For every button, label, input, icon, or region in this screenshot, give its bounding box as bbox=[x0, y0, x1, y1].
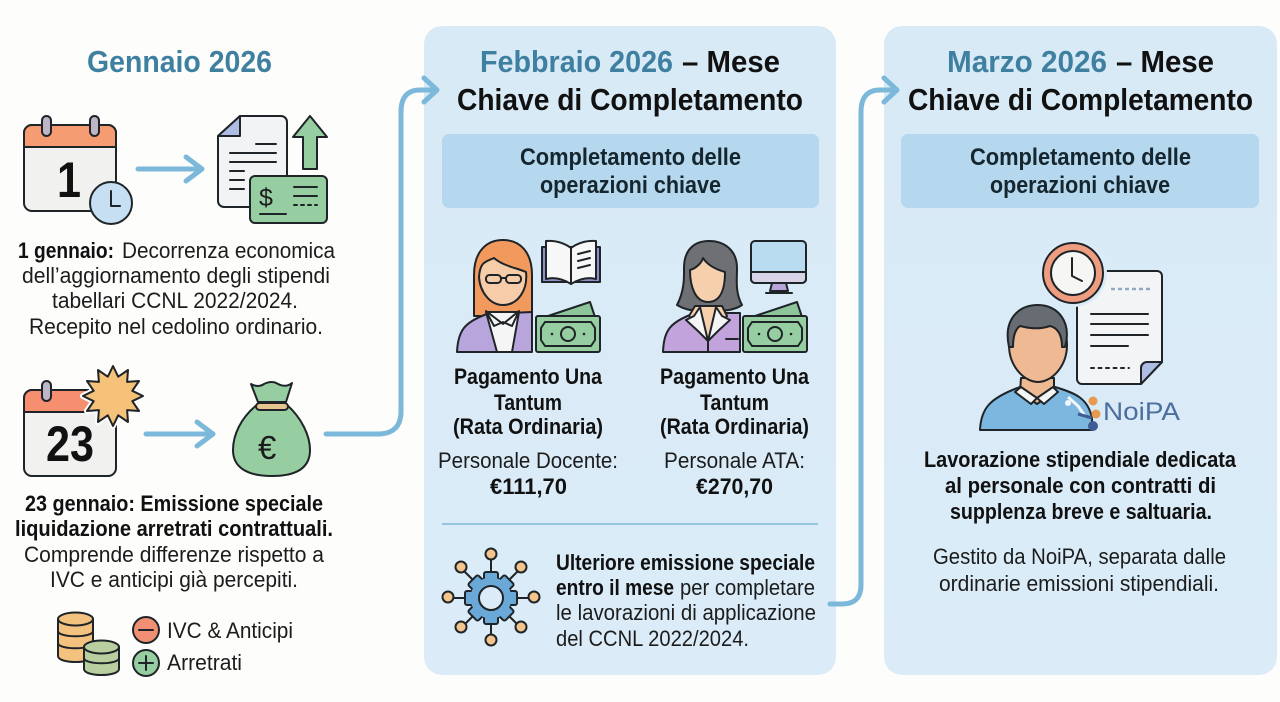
text: 23 gennaio: liquidazione arretrati contrattuali. bbox=[15, 516, 333, 541]
heading: febbraio: – Mese bbox=[682, 44, 780, 79]
banner: completamento: Completamento delle bbox=[970, 144, 1191, 171]
text: 1 gennaio: Recepito nel cedolino ordinario. bbox=[29, 314, 323, 339]
text: 23 gennaio: IVC e anticipi già percepiti. bbox=[50, 567, 298, 592]
arrow: gennaio to febbraio connector bbox=[326, 78, 437, 434]
legend: IVC e anticipi: IVC & Anticipi bbox=[167, 618, 293, 643]
heading: febbraio: Febbraio 2026 bbox=[480, 44, 673, 79]
text: personale ATA bbox=[660, 364, 810, 499]
heading: marzo: – Mese bbox=[1116, 44, 1214, 79]
icon: employee with clock, document and NoiPA logo: NoiPA bbox=[1103, 398, 1180, 426]
text: ulteriore emissione bbox=[556, 550, 816, 651]
text: personale docente: Tantum bbox=[494, 390, 562, 415]
panel: marzo content bbox=[901, 44, 1259, 596]
text: personale docente: (Rata Ordinaria) bbox=[453, 414, 603, 439]
icon: calendar day 1 with clock: 1 bbox=[57, 152, 81, 208]
text: personale ATA: Tantum bbox=[700, 390, 769, 415]
text: personale ATA: Pagamento Una bbox=[660, 364, 810, 389]
icon: calendar day 23 with burst: 23 bbox=[46, 416, 94, 472]
banner: completamento: operazioni chiave bbox=[540, 172, 721, 199]
text: gestito da NoiPA bbox=[933, 544, 1226, 596]
text: lavorazione stipendiale bbox=[924, 447, 1237, 524]
text: 1 gennaio: Decorrenza economica bbox=[122, 238, 336, 263]
heading: marzo: Marzo 2026 bbox=[947, 44, 1107, 79]
banner: completamento: operazioni chiave bbox=[990, 172, 1170, 199]
text: 1 gennaio: dell’aggiornamento degli stipendi bbox=[22, 263, 330, 288]
icon: calendar day 1 with clock bbox=[24, 116, 132, 224]
icon: document with pay slip and up arrow: $ bbox=[259, 184, 273, 212]
text: gestito da NoiPA: Gestito da NoiPA, separata dalle bbox=[933, 544, 1226, 569]
banner: completamento bbox=[442, 134, 819, 208]
icon: teacher with book and money bbox=[457, 240, 600, 352]
heading: febbraio bbox=[457, 44, 803, 117]
text: 23 gennaio bbox=[15, 491, 333, 592]
heading: marzo bbox=[908, 44, 1253, 117]
text: lavorazione stipendiale: Lavorazione stipendiale dedicata bbox=[924, 447, 1237, 472]
arrow: febbraio to marzo connector bbox=[830, 78, 897, 604]
column: gennaio 2026 bbox=[15, 44, 336, 676]
text: personale docente: Pagamento Una bbox=[454, 364, 603, 389]
icon: coin stacks bbox=[58, 612, 119, 675]
text: personale docente: €111,70 bbox=[490, 474, 567, 499]
panel: febbraio content bbox=[438, 44, 819, 651]
text: 1 gennaio: 1 gennaio: bbox=[18, 238, 114, 263]
icon: gear with network nodes bbox=[442, 548, 540, 646]
text: 23 gennaio: Comprende differenze rispetto a bbox=[24, 542, 325, 567]
text: personale ATA: €270,70 bbox=[696, 474, 773, 499]
text: lavorazione stipendiale: supplenza breve e saltuaria. bbox=[950, 499, 1212, 524]
icon: ATA staff with monitor and money bbox=[663, 241, 807, 352]
text: 23 gennaio: 23 gennaio: Emissione speciale bbox=[25, 491, 323, 516]
arrow: calendar to document bbox=[138, 157, 202, 181]
icon: euro money bag bbox=[233, 382, 310, 476]
legend: arretrati: Arretrati bbox=[167, 650, 242, 675]
arrow: calendar to money bag bbox=[146, 422, 213, 446]
legend: arretrati bbox=[133, 650, 242, 676]
icon: employee with clock, document and NoiPA logo bbox=[980, 239, 1180, 431]
heading: febbraio: Chiave di Completamento bbox=[457, 82, 803, 117]
text: personale docente bbox=[438, 364, 618, 499]
heading: marzo: Chiave di Completamento bbox=[908, 82, 1253, 117]
panel: febbraio background bbox=[424, 26, 836, 675]
text: ulteriore emissione: Ulteriore emissione speciale bbox=[556, 550, 815, 575]
text: gestito da NoiPA: ordinarie emissioni stipendiali. bbox=[939, 571, 1219, 596]
text: ulteriore emissione: le lavorazioni di applicazione bbox=[556, 600, 816, 625]
text: 1 gennaio: tabellari CCNL 2022/2024. bbox=[52, 288, 298, 313]
heading: gennaio: Gennaio 2026 bbox=[87, 44, 272, 79]
icon: euro money bag: € bbox=[258, 429, 276, 466]
icon: calendar day 23 with burst bbox=[24, 366, 143, 476]
text: 1 gennaio bbox=[18, 238, 336, 339]
banner: completamento: Completamento delle bbox=[520, 144, 741, 171]
banner: completamento bbox=[901, 134, 1259, 208]
text: ulteriore emissione: del CCNL 2022/2024. bbox=[556, 626, 749, 651]
text: ulteriore emissione: per completare bbox=[680, 575, 815, 600]
text: personale docente: Personale Docente: bbox=[438, 448, 618, 473]
text: personale ATA: Personale ATA: bbox=[664, 448, 805, 473]
icon: document with pay slip and up arrow bbox=[218, 116, 327, 223]
text: ulteriore emissione: entro il mese bbox=[556, 575, 674, 600]
text: personale ATA: (Rata Ordinaria) bbox=[660, 414, 809, 439]
text: lavorazione stipendiale: al personale con contratti di bbox=[945, 473, 1216, 498]
panel: marzo background bbox=[884, 26, 1277, 675]
